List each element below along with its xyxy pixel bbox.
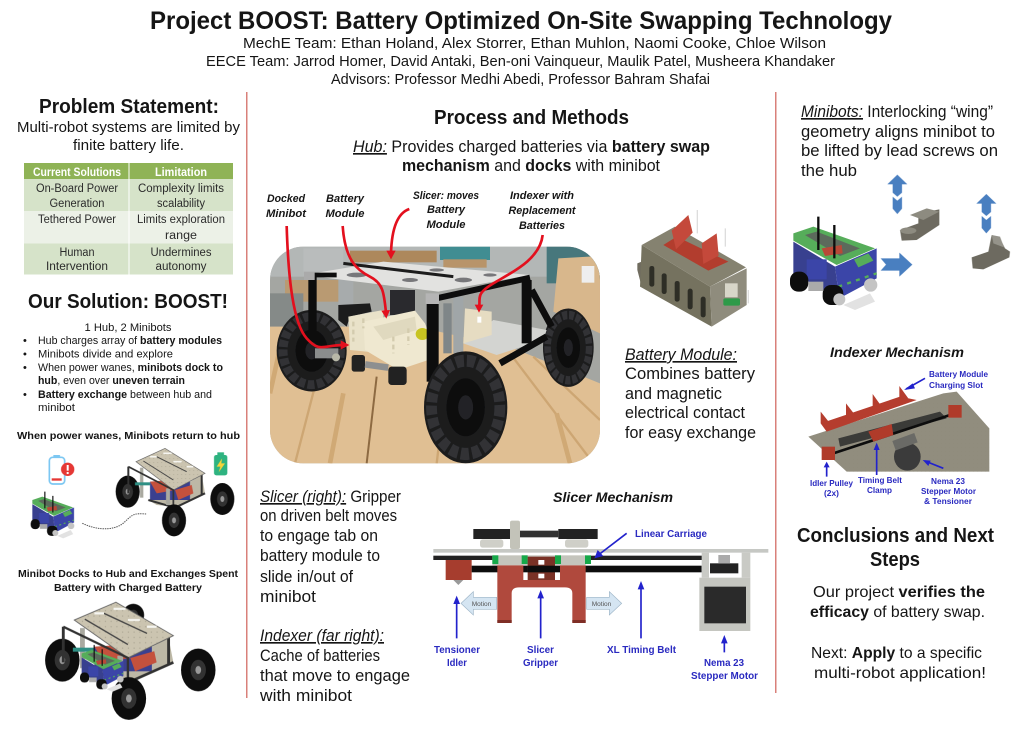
table: current solutions and limitations: scalability (157, 198, 205, 210)
solution bullets: • (23, 335, 27, 347)
slicer and indexer description: on driven belt moves (260, 507, 397, 525)
problem text (17, 119, 240, 154)
indexer diagram labels: Idler Pulley (810, 478, 853, 488)
panel: minibots and conclusions (790, 103, 1010, 682)
table: current solutions and limitations: autonomy (156, 261, 207, 273)
battery module description: Battery Module: (625, 346, 737, 364)
callout labels on photo: Battery (427, 204, 466, 216)
table: current solutions and limitations: Generation (50, 198, 104, 210)
heading: minibot docks to hub: Battery with Charged Battery (54, 582, 202, 594)
callout labels on photo: Battery (326, 193, 365, 205)
title: Project BOOST: Battery Optimized On-Site Swapping Technology (150, 7, 892, 35)
conclusions text: multi-robot application! (814, 665, 986, 682)
minibots description: be lifted by lead screws on (801, 142, 998, 160)
slicer and indexer description: slide in/out of (260, 568, 353, 586)
slicer diagram labels: XL Timing Belt (607, 645, 677, 656)
table: current solutions and limitations: Undermines (150, 247, 212, 259)
solution summary: 1 Hub, 2 Minibots (84, 322, 172, 334)
battery module description: electrical contact (625, 404, 745, 422)
icon: charged battery (214, 452, 227, 475)
diagram: slicer mechanism (433, 521, 768, 682)
slicer diagram labels: Motion (472, 601, 492, 608)
heading: minibots return to hub: When power wanes, Minibots return to hub (17, 430, 240, 442)
team and advisors credits: MechE Team: Ethan Holand, Alex Storrer, Ethan Muhlon, Naomi Cooke, Chloe Wilson (243, 35, 826, 52)
solution bullets: Battery exchange between hub and (38, 389, 212, 401)
battery module description (625, 346, 756, 442)
heading: slicer mechanism: Slicer Mechanism (553, 489, 673, 505)
blue arrows (881, 175, 996, 277)
dashed path arrow (82, 514, 146, 529)
problem text: finite battery life. (73, 137, 184, 154)
callout labels on photo: Minibot (266, 208, 307, 220)
table: current solutions and limitations (24, 163, 233, 275)
slicer diagram labels: Stepper Motor (691, 671, 758, 682)
minibots description: the hub (801, 162, 857, 180)
table: current solutions and limitations: range (165, 230, 197, 242)
slicer and indexer description: battery module to (260, 547, 380, 565)
slicer diagram labels: Nema 23 (704, 658, 744, 669)
table: current solutions and limitations: Current Solutions (33, 167, 121, 179)
callout labels on photo: Module (326, 208, 364, 220)
heading: minibot docks to hub (18, 568, 239, 594)
conclusions text: Our project verifies the (813, 584, 985, 601)
illustration: minibot wing geometry (790, 175, 1010, 310)
heading: minibot docks to hub: Minibot Docks to Hub and Exchanges Spent (18, 568, 239, 580)
team and advisors credits: EECE Team: Jarrod Homer, David Antaki, Ben-oni Vainqueur, Maulik Patel, Musheera Khandaker (206, 53, 835, 70)
table: current solutions and limitations: Limitation (155, 167, 207, 179)
minibot model (790, 217, 877, 310)
conclusions text (810, 584, 986, 682)
slicer and indexer description: that move to engage (260, 667, 410, 685)
slicer and indexer description: Indexer (far right): (260, 627, 384, 645)
panel: process and methods (259, 107, 768, 705)
battery module description: for easy exchange (625, 424, 756, 442)
wing part left (900, 208, 939, 241)
wing part right (972, 235, 1010, 269)
panel: problem statement (17, 96, 240, 275)
slicer and indexer description (259, 488, 410, 705)
solution bullets: minibot (38, 402, 75, 414)
table: current solutions and limitations: Human (60, 247, 94, 259)
heading: indexer mechanism: Indexer Mechanism (830, 344, 964, 360)
minibot (31, 492, 74, 538)
hub model (116, 448, 234, 536)
table: current solutions and limitations: Intervention (46, 261, 108, 273)
indexer diagram labels: Clamp (867, 485, 892, 495)
hub description: mechanism and docks with minibot (402, 157, 660, 175)
solution bullets: Minibots divide and explore (38, 348, 173, 360)
indexer diagram labels: Timing Belt (858, 475, 902, 485)
icon: low battery (49, 455, 74, 484)
slicer diagram labels: Linear Carriage (635, 529, 707, 540)
slicer diagram labels: Gripper (523, 658, 558, 669)
minibots description: Minibots: Interlocking “wing” (801, 103, 993, 121)
slicer diagram labels: Idler (447, 658, 467, 669)
indexer diagram labels: Nema 23 (931, 476, 965, 486)
battery module description: Combines battery (625, 365, 756, 383)
heading: problem statement: Problem Statement: (39, 96, 219, 118)
table: current solutions and limitations: Tethered Power (38, 214, 116, 226)
red callout arrows (287, 209, 543, 350)
table: current solutions and limitations: Limits exploration (137, 214, 225, 226)
hub description: Hub: Provides charged batteries via battery swap (353, 138, 710, 156)
callout labels on photo: Module (426, 219, 466, 231)
conclusions text: Next: Apply to a specific (811, 645, 982, 662)
callout labels on photo: Slicer: moves (413, 190, 479, 202)
solution bullets (23, 335, 223, 414)
slicer and indexer description: Slicer (right): Gripper (260, 488, 401, 506)
callout labels on photo: Batteries (519, 220, 565, 232)
solution bullets: • (23, 348, 27, 360)
indexer diagram labels: Stepper Motor (921, 486, 977, 496)
slicer diagram labels: Tensioner (434, 645, 480, 656)
solution bullets: • (23, 362, 27, 374)
heading: conclusions and next steps: Steps (870, 549, 920, 571)
heading: conclusions and next steps: Conclusions and Next (797, 525, 994, 547)
panel: our solution (23, 291, 228, 414)
indexer diagram labels: Battery Module (929, 369, 988, 379)
solution bullets: When power wanes, minibots dock to (38, 362, 223, 374)
indexer diagram labels: Charging Slot (929, 380, 983, 390)
photo: hub and docked minibot (270, 247, 600, 463)
callout labels on photo: Indexer with (510, 190, 574, 202)
slicer and indexer description: Cache of batteries (260, 647, 380, 665)
heading: process and methods: Process and Methods (434, 107, 629, 129)
indexer diagram labels (810, 369, 988, 506)
illustration: minibot returning to hub (31, 448, 234, 538)
callout labels on photo (266, 190, 577, 232)
problem text: Multi-robot systems are limited by (17, 119, 240, 136)
slicer diagram labels: Slicer (527, 645, 554, 656)
slicer and indexer description: minibot (260, 588, 316, 606)
solution bullets: • (23, 389, 27, 401)
diagram: indexer mechanism (808, 369, 989, 506)
table: current solutions and limitations: Complexity limits (138, 183, 224, 195)
team and advisors credits: Advisors: Professor Medhi Abedi, Professor Bahram Shafai (331, 71, 710, 88)
icon: battery module model (637, 210, 748, 327)
heading: conclusions and next steps (797, 525, 994, 571)
heading: our solution: Our Solution: BOOST! (28, 291, 228, 313)
callout labels on photo: Replacement (508, 205, 577, 217)
slicer and indexer description: to engage tab on (260, 527, 378, 545)
slicer diagram labels (434, 529, 758, 682)
slicer diagram labels: Motion (592, 601, 612, 608)
minibots description: geometry aligns minibot to (801, 123, 995, 141)
slicer and indexer description: with minibot (259, 687, 352, 705)
indexer diagram labels: & Tensioner (924, 496, 973, 506)
minibots description (801, 103, 998, 180)
solution bullets: Hub charges array of battery modules (38, 335, 222, 347)
indexer diagram labels: (2x) (824, 488, 839, 498)
team and advisors credits (206, 35, 835, 88)
callout labels on photo: Docked (267, 193, 305, 205)
table: current solutions and limitations: On-Board Power (36, 183, 118, 195)
conclusions text: efficacy of battery swap. (810, 604, 985, 621)
hub description (353, 138, 710, 175)
solution bullets: hub, even over uneven terrain (38, 375, 185, 387)
illustration: hub with docked minibot (45, 602, 216, 720)
battery module description: and magnetic (625, 385, 722, 403)
